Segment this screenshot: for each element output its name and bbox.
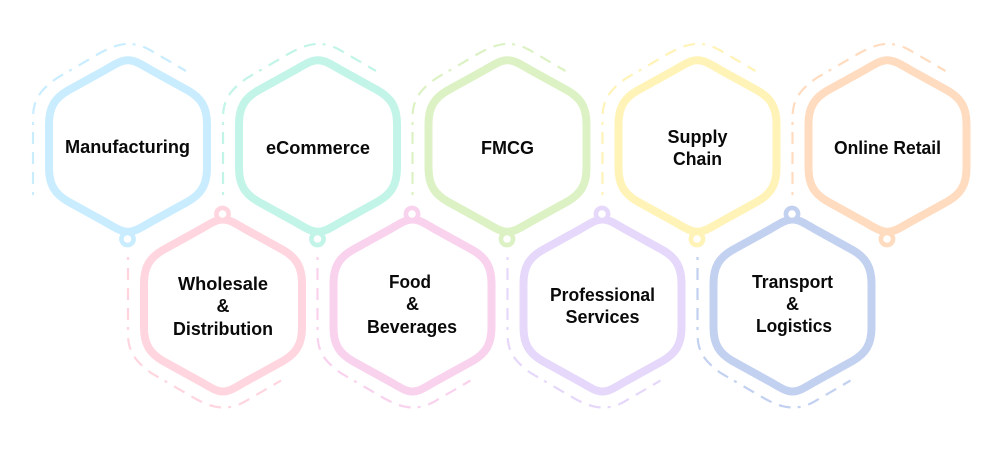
hexagon: Online Retail [792, 44, 966, 245]
hexagon: Supply Chain: Chain [673, 149, 722, 169]
hexagon: Transport & Logistics: & [786, 294, 799, 314]
hexagon: FMCG [412, 44, 586, 245]
hexagon: Food & Beverages: Beverages [367, 317, 457, 337]
hexagon: Professional Services: Professional [550, 285, 655, 305]
hexagon: Professional Services [508, 208, 682, 408]
hexagon: Food & Beverages [318, 208, 492, 408]
hexagon: Food & Beverages: & [406, 294, 419, 314]
hexagon: Transport & Logistics [698, 208, 872, 408]
hexagon: Wholesale & Distribution: & [216, 296, 230, 316]
hexagon: Food & Beverages: Food [389, 272, 431, 292]
hexagon: Manufacturing: Manufacturing [65, 137, 190, 157]
hexagon: Manufacturing [33, 44, 207, 245]
hexagon: Transport & Logistics: Logistics [756, 316, 832, 336]
hexagon: Professional Services: Services [566, 307, 640, 327]
hexagon: Online Retail: Online Retail [834, 138, 941, 158]
hexagon: Wholesale & Distribution [128, 208, 302, 408]
hexagon: eCommerce [223, 44, 397, 245]
hexagon: eCommerce: eCommerce [266, 138, 370, 158]
hexagon: Transport & Logistics: Transport [752, 272, 833, 292]
hexagon: FMCG: FMCG [481, 138, 534, 158]
hexagon: Wholesale & Distribution: Distribution [173, 319, 273, 339]
hexagon: Supply Chain: Supply [668, 127, 728, 147]
hexagon: Wholesale & Distribution: Wholesale [178, 274, 268, 294]
hexagon: Supply Chain [602, 44, 776, 245]
